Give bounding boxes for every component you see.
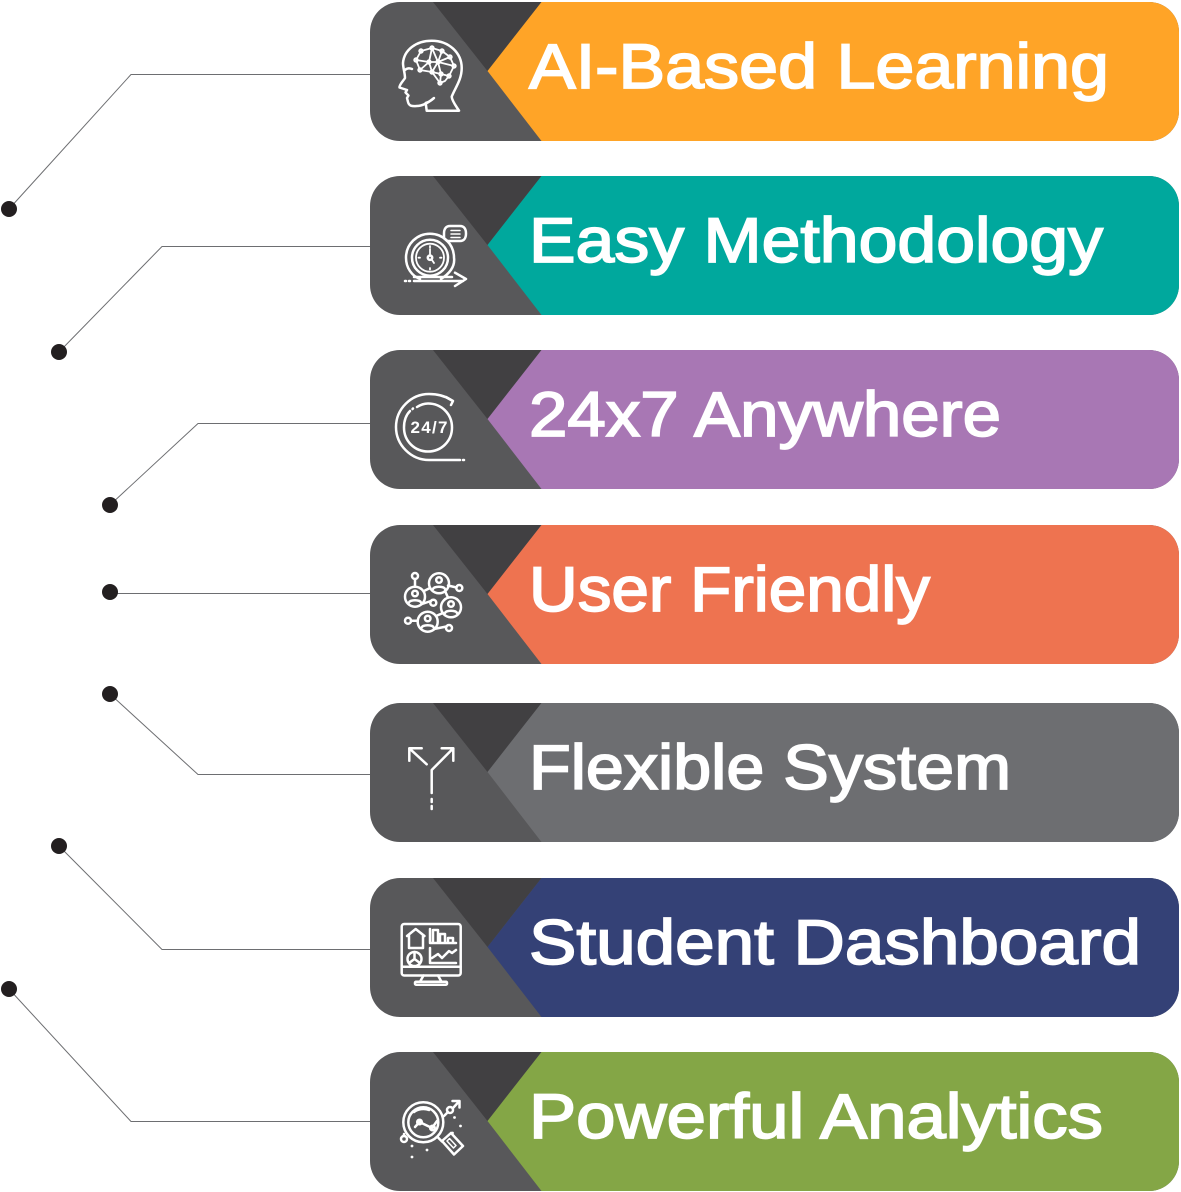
heading: User Friendly: User Friendly	[529, 555, 931, 625]
heading: Flexible System: Flexible System	[529, 733, 1011, 803]
connector line with dot	[1, 981, 370, 1122]
panel: AI-Based Learning	[1, 2, 1179, 217]
bar: grey with dark left tab	[370, 703, 1179, 842]
bar: navy with dark left tab	[370, 878, 1179, 1017]
icon: dashboard monitor	[402, 924, 461, 985]
icon: 24/7 circular arrow: 24/7	[410, 418, 448, 437]
panel: 24x7 Anywhere	[102, 350, 1179, 513]
bar: green with dark left tab	[370, 1052, 1179, 1191]
icon: head with neural network brain	[399, 41, 462, 111]
heading: Powerful Analytics: Powerful Analytics	[529, 1082, 1103, 1152]
bar: teal with dark left tab	[370, 176, 1179, 315]
panel: Powerful Analytics	[1, 981, 1179, 1191]
heading: Student Dashboard: Student Dashboard	[529, 908, 1141, 978]
heading: AI-Based Learning: AI-Based Learning	[529, 32, 1109, 102]
bar: coral with dark left tab	[370, 525, 1179, 664]
icon: splitting arrows	[409, 748, 453, 809]
panel: Student Dashboard	[51, 838, 1179, 1017]
panel: User Friendly	[102, 525, 1179, 664]
connector line with dot	[51, 838, 370, 950]
heading: 24x7 Anywhere: 24x7 Anywhere	[529, 380, 1001, 450]
connector line with dot	[102, 424, 370, 513]
bar: purple with dark left tab	[370, 350, 1179, 489]
connector line with dot	[102, 686, 370, 774]
connector line with dot	[51, 246, 370, 360]
panel: Flexible System	[102, 686, 1179, 842]
connector line with dot	[102, 584, 370, 600]
icon: magnifier over analytics chart	[401, 1101, 463, 1158]
icon: 24/7 circular arrow	[396, 394, 464, 460]
icon: clock with speech bubble and arrow	[405, 226, 466, 286]
icon: connected users network	[405, 573, 462, 632]
heading: Easy Methodology: Easy Methodology	[529, 206, 1104, 276]
panel: Easy Methodology	[51, 176, 1179, 360]
bar: orange with dark left tab	[370, 2, 1179, 141]
connector line with dot	[1, 74, 370, 217]
